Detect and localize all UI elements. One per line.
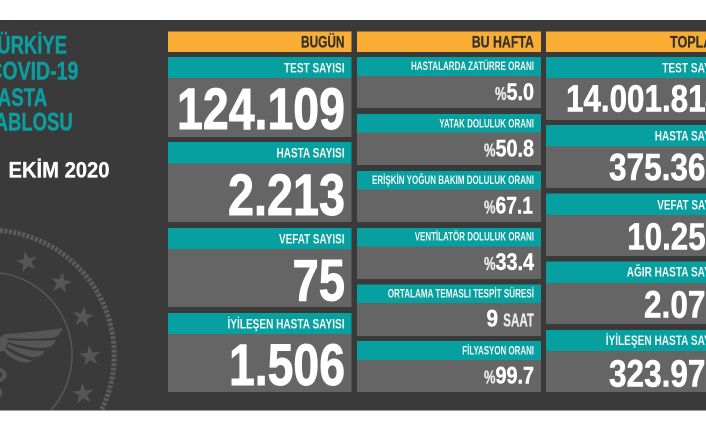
card: hasta sayısı: HASTA SAYISI [276,145,344,161]
header: TOPLAM [546,32,706,52]
header: BU HAFTA: BU HAFTA [472,33,534,51]
card: iyileşen hasta sayısı [168,313,352,398]
seal emblem [0,230,114,410]
card: filyasyon oranı: 99.7 [496,362,534,389]
card: temaslı tespit süresi: 9 [486,306,498,333]
card: filyasyon oranı: FİLYASYON ORANI [462,342,534,357]
header: BUGÜN [168,32,352,52]
card: erişkin yoğun bakım: % [484,197,496,217]
card: iyileşen hasta sayısı: 1.506 [229,333,345,398]
card: ventilatör doluluk [357,228,541,279]
card: test sayısı: 124.109 [177,77,345,142]
card: toplam test [546,57,706,121]
date: EKİM 2020 [8,158,110,183]
card: yatak doluluk: 50.8 [496,136,534,163]
card: temaslı tespit süresi [357,284,541,336]
card: zatürre oranı: HASTALARDA ZATÜRRE ORANI [411,58,534,73]
card: erişkin yoğun bakım [357,171,541,222]
card: test sayısı [168,57,352,142]
card: temaslı tespit süresi: SAAT [503,311,534,331]
card: iyileşen hasta sayısı: İYİLEŞEN HASTA SAYISI [228,315,344,331]
card: toplam iyileşen [546,330,706,396]
card: ventilatör doluluk: 33.4 [496,249,534,276]
card: test sayısı: TEST SAYISI [284,60,344,76]
card: erişkin yoğun bakım: 67.1 [496,192,533,219]
title [0,30,78,137]
header: BUGÜN: BUGÜN [301,32,344,52]
card: zatürre oranı [357,57,541,108]
card: ağır hasta [546,262,706,326]
card: toplam hasta [546,125,706,189]
card: vefat sayısı [168,228,352,314]
card: yatak doluluk [357,114,541,165]
column: BU HAFTA [357,32,541,392]
card: ventilatör doluluk: % [484,254,496,274]
card: yatak doluluk: % [484,141,496,161]
column: TOPLAM [546,32,706,396]
card: zatürre oranı: 5.0 [506,79,534,106]
card: vefat sayısı: 75 [292,249,345,314]
card: yatak doluluk: YATAK DOLULUK ORANI [439,116,534,130]
card: temaslı tespit süresi: ORTALAMA TEMASLI TESPİT SÜRESİ [388,286,534,301]
card: filyasyon oranı [357,341,541,392]
card: vefat sayısı: VEFAT SAYISI [279,230,344,246]
card: hasta sayısı [168,142,352,228]
card: ventilatör doluluk: VENTİLATÖR DOLULUK ORANI [415,229,534,244]
header: BU HAFTA [357,32,541,52]
card: hasta sayısı: 2.213 [228,163,345,228]
column: BUGÜN [168,32,352,398]
card: zatürre oranı: % [495,84,506,104]
card: filyasyon oranı: % [484,367,496,387]
card: toplam vefat [546,194,706,258]
card: erişkin yoğun bakım: ERİŞKİN YOĞUN BAKIM DOLULUK ORANI [372,172,534,187]
